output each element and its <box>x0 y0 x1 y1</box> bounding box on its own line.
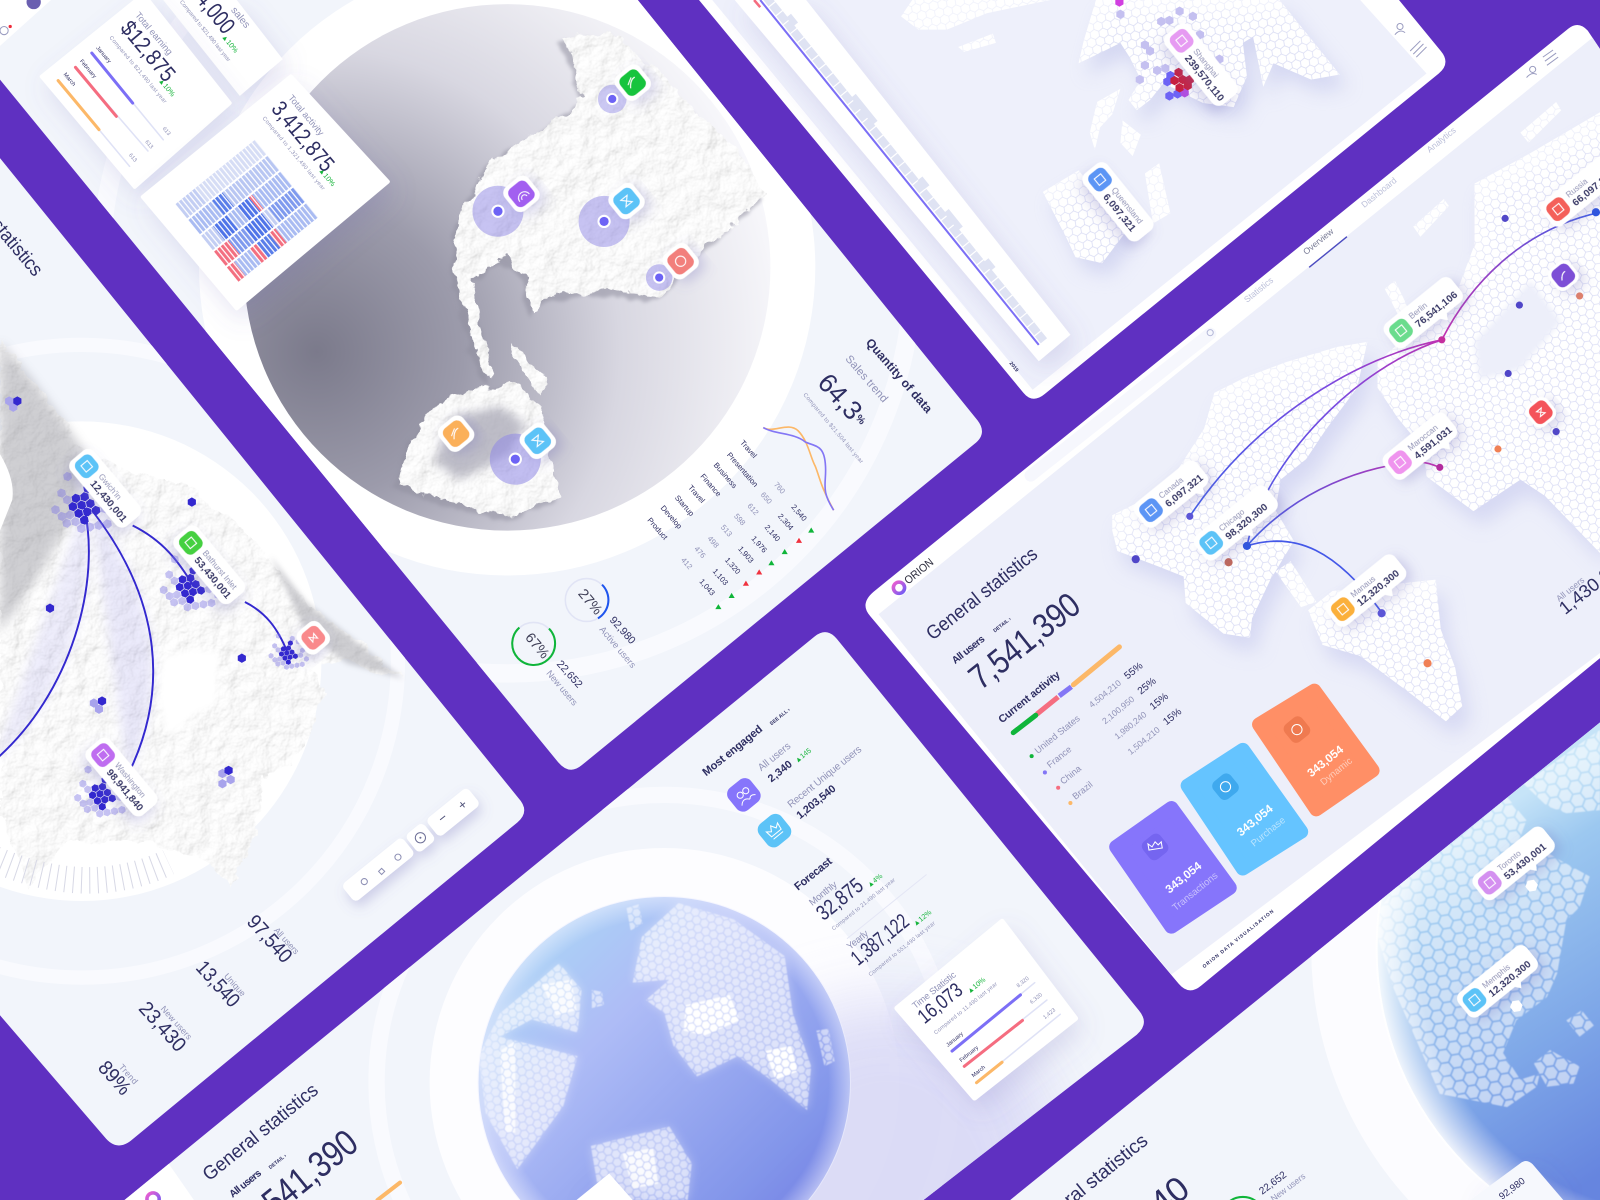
card: transactions <box>1116 808 1230 927</box>
table: categories: Startup <box>673 493 696 518</box>
table: categories: Finance <box>698 472 723 498</box>
ring: active users: 27% <box>574 586 605 619</box>
pin: Chicago: 98,320,300 <box>1224 502 1271 543</box>
pin: Canada: 6,097,321 <box>1164 473 1206 510</box>
card: total earning: 613 <box>143 139 154 150</box>
pin: Chicago: Chicago <box>1217 507 1247 533</box>
card: sales: Compared to $21,490 last year <box>178 0 231 63</box>
white halo disk <box>199 0 815 576</box>
most engaged: Recent Unique users <box>786 744 864 810</box>
ring: active users: 92,980 <box>607 614 638 647</box>
ring: new users: 22,652 <box>554 658 585 691</box>
pin: Queensland <box>1079 159 1157 245</box>
text: general statistics: DETAIL › <box>268 1153 288 1171</box>
pin: Queensland: 6,097,321 <box>1100 192 1137 235</box>
table: activity by country: 1,504,210 <box>1126 725 1162 757</box>
pin: Shanghai <box>1161 20 1241 109</box>
card: time statistic: 16,073 <box>914 979 967 1028</box>
table: categories: 2,540 <box>789 503 809 523</box>
card: time statistic: Time Statistic <box>910 969 958 1011</box>
nav tabs: Analytics <box>1425 125 1458 155</box>
card: sales: ▲10% <box>220 33 240 55</box>
card: total earning: 613 <box>161 126 171 137</box>
white halo disk <box>430 848 899 1200</box>
card: transactions: 343,054 <box>1163 859 1205 896</box>
card: dynamic: Dynamic <box>1318 756 1355 788</box>
stats row: 13,540 <box>191 957 244 1012</box>
card: total activity: Total activity <box>286 93 326 138</box>
pin: Washington <box>82 734 161 820</box>
table: categories: 2,140 <box>763 523 782 543</box>
grey relief globe <box>244 4 770 531</box>
table: activity by country: 15% <box>1148 691 1171 713</box>
card: total activity: Compared to 1,321,490 last year <box>261 116 326 192</box>
outer ring <box>0 345 398 978</box>
lavender glow <box>714 1000 1061 1200</box>
pin: Russia: Russia <box>1564 177 1590 200</box>
table: activity by country: 25% <box>1136 676 1159 697</box>
outer ring around globe <box>98 198 916 682</box>
pin: Toronto <box>1469 823 1561 908</box>
text: general statistics <box>198 1079 400 1200</box>
pin: Manaus <box>1322 551 1413 635</box>
icons: user and filters <box>1395 23 1427 57</box>
most engaged <box>700 707 864 851</box>
logo: Orion: ORION <box>902 557 936 587</box>
card: total activity: 3,412,875 <box>267 96 340 176</box>
card: transactions: Transactions <box>1170 870 1220 914</box>
hex map: Asia and Australia <box>901 0 1348 276</box>
table: activity by country: United States <box>1033 713 1082 756</box>
stats row: New users <box>159 1004 195 1042</box>
line chart: sales trend <box>763 427 834 510</box>
timeline strip <box>735 0 1070 373</box>
forecast: Compared to 21,490 last year <box>831 877 897 932</box>
table: categories: Travel <box>738 438 759 460</box>
card: purchase: 343,054 <box>1235 802 1276 839</box>
pin: Gwich'in: Gwich'in <box>97 472 123 501</box>
card: time statistic: Compared to 11,490 last year <box>933 981 999 1036</box>
table: categories: 1,976 <box>750 534 769 555</box>
icon pin: red marker <box>1522 394 1559 431</box>
pin: Gwich'in <box>66 446 144 531</box>
text: quantity of data: Compared to $21,504 last year <box>802 392 864 465</box>
card: total earning: January <box>94 45 112 65</box>
ring: new users: New users <box>544 668 580 708</box>
white halo disk <box>1311 577 1600 1200</box>
table: activity by country: 2,100,950 <box>1100 694 1136 726</box>
bars: months <box>58 53 163 166</box>
route arcs <box>0 505 288 776</box>
table: categories: Travel <box>686 483 707 505</box>
header and logo <box>124 1163 194 1200</box>
card: purchase <box>1188 750 1301 868</box>
card: total earning: $12,875 <box>116 16 181 87</box>
table: categories: 1,320 <box>723 556 742 576</box>
map dots <box>1132 208 1600 667</box>
icon: users tile <box>724 775 764 815</box>
card: time statistic <box>897 921 1076 1098</box>
current activity bar <box>996 647 1119 733</box>
map controls: − <box>435 809 451 826</box>
pin: Toronto: 53,430,001 <box>1502 842 1549 882</box>
connection arcs <box>1190 212 1600 612</box>
panel: Shanghai hex map <box>694 0 1469 408</box>
card: time statistic: 6,320 <box>1029 992 1044 1006</box>
footer label: ORION DATA VISUALISATION <box>1202 908 1276 970</box>
pin: Bathurst Inlet: 53,430,001 <box>191 555 233 602</box>
stats row: 89% <box>93 1057 135 1100</box>
table: categories: Product <box>645 516 670 542</box>
table: categories: 2,304 <box>776 512 796 533</box>
most engaged: 2,340 <box>766 758 795 785</box>
search bar <box>1031 330 1213 476</box>
table: activity by country: 1,980,240 <box>1112 709 1149 741</box>
pin: Canada <box>1130 457 1215 536</box>
icon pin: red <box>659 240 702 283</box>
table: activity by country: 55% <box>1123 661 1145 682</box>
nav tabs <box>1242 125 1458 305</box>
table: activity by country: France <box>1045 744 1073 770</box>
card: sales: sales <box>228 5 252 31</box>
table: categories: Presentation <box>725 451 760 489</box>
pin: Maroccan <box>1379 409 1464 488</box>
map controls: + <box>455 796 470 813</box>
pin: Chicago <box>1190 482 1285 569</box>
panel: Orion general statistics <box>857 0 1600 1000</box>
text: quantity of data: 64,3 <box>812 368 868 426</box>
pin: Maroccan: Maroccan <box>1406 423 1440 453</box>
icon pin: blue <box>605 179 648 223</box>
forecast: ▲4% <box>866 872 885 889</box>
table: activity by country <box>1030 661 1184 805</box>
card: time statistic: 8,320 <box>1016 976 1031 989</box>
forecast: 32,875 <box>812 873 868 925</box>
table: activity by country: China <box>1058 763 1084 786</box>
stats row: 23,430 <box>134 998 190 1057</box>
table: categories: 498 <box>706 534 721 550</box>
text: general statistics: General statistics <box>198 1079 323 1186</box>
card: total activity <box>143 77 388 308</box>
blue hex globe <box>478 896 851 1200</box>
table: activity by country: 15% <box>1161 706 1184 728</box>
table: activity by country: Brazil <box>1070 779 1095 802</box>
stats row: Trend <box>117 1062 140 1086</box>
pin: Bathurst Inlet: Bathurst Inlet <box>201 549 239 592</box>
pin: Toronto: Toronto <box>1496 849 1523 873</box>
icon pin: purple <box>500 172 543 215</box>
card: time statistic: ▲10% <box>966 975 988 995</box>
table: categories: 650 <box>759 490 774 506</box>
pin: Bathurst Inlet <box>170 522 248 607</box>
forecast: Forecast <box>792 855 835 893</box>
card: purchase: Purchase <box>1249 815 1288 849</box>
panel: blue hex globe <box>1000 577 1600 1200</box>
ring: new users <box>512 622 585 708</box>
stats row: All users <box>272 925 302 957</box>
card: time statistic: March <box>971 1065 987 1079</box>
card fragment at globe bottom <box>577 1173 633 1200</box>
header corner with avatar and bell <box>0 0 51 46</box>
hex map: world <box>1112 102 1600 736</box>
location markers on grey globe <box>472 85 672 485</box>
nav tabs: Dashboard <box>1359 175 1399 210</box>
card: time statistic: January <box>945 1031 965 1048</box>
text: general statistics: All users <box>950 634 988 667</box>
icon: crown tile <box>754 811 795 851</box>
forecast: 1,387,122 <box>846 909 914 970</box>
pin: Washington: Washington <box>113 761 147 800</box>
nav tabs: Overview <box>1301 226 1336 257</box>
outer ring <box>377 795 952 1200</box>
pin: Manaus: 12,320,300 <box>1355 568 1402 609</box>
table: categories: 412 <box>679 556 694 571</box>
text: quantity of data: % <box>853 413 867 427</box>
most engaged: All users <box>756 741 793 774</box>
icon pin: red marker <box>293 618 333 658</box>
icon pin: light blue <box>516 419 559 462</box>
pin: Queensland: Queensland <box>1110 186 1145 226</box>
pin: Memphis <box>1454 942 1544 1025</box>
panel: grey globe and quantity of data <box>0 0 1020 796</box>
heatmap <box>176 140 318 282</box>
icons: user and filters <box>1527 50 1558 78</box>
ring: new users: 67% <box>521 630 552 662</box>
card: total earning <box>42 0 230 187</box>
text: quantity of data <box>802 336 935 465</box>
card: time statistic: 1,423 <box>1042 1007 1057 1021</box>
table: categories: 476 <box>692 544 708 560</box>
pin: Berlin <box>1380 274 1470 356</box>
card: total earning: March <box>62 72 76 88</box>
forecast: Monthly <box>807 879 840 908</box>
ring: active users <box>565 579 638 670</box>
text: quantity of data: Quantity of data <box>863 336 935 416</box>
current activity bar: Current activity <box>996 669 1063 726</box>
pin: Washington: 98,941,840 <box>104 768 145 814</box>
pin: Canada: Canada <box>1157 475 1185 501</box>
forecast <box>792 855 937 978</box>
white halo disk <box>0 421 321 901</box>
ring: new users: 22,652 <box>1257 1170 1289 1197</box>
text: general statistics: General statistics <box>922 543 1042 645</box>
timeline strip: 2019 <box>1008 361 1020 373</box>
forecast: Compared to 551,490 last year <box>868 921 937 978</box>
pin: Gwich'in: 12,430,001 <box>87 479 129 525</box>
card: total earning: February <box>78 59 97 80</box>
stat: all users: All users <box>1554 575 1587 604</box>
most engaged: Most engaged <box>700 723 765 779</box>
pin: Shanghai: Shanghai <box>1191 47 1220 80</box>
table: categories: 513 <box>719 523 734 538</box>
table: activity by country: 4,504,210 <box>1087 678 1123 710</box>
stats row: 97,540 <box>242 911 296 968</box>
card: sales <box>163 0 283 96</box>
bars: months <box>952 983 1060 1083</box>
table: categories: 1,103 <box>711 567 730 587</box>
card: time statistic: February <box>959 1045 980 1064</box>
selected hexes <box>1508 877 1540 1015</box>
most engaged: ▲145 <box>793 747 813 765</box>
text: general statistics <box>922 543 1088 697</box>
icon pin: purple marker <box>1545 257 1582 294</box>
hex clusters <box>5 396 310 822</box>
pin: Shanghai: 239,570,110 <box>1182 53 1226 104</box>
forecast: Yearly <box>845 928 871 952</box>
table: categories <box>645 438 814 609</box>
pin: Memphis: 12,320,300 <box>1487 959 1534 1000</box>
table: categories: 612 <box>745 502 761 517</box>
table: categories: 1,043 <box>697 577 717 597</box>
card fragment: active users <box>1470 1161 1563 1200</box>
ring: new users <box>1220 1170 1308 1200</box>
map controls <box>341 787 481 903</box>
icon pin: orange <box>435 412 478 455</box>
panel: relief map of North America <box>0 153 541 1153</box>
pin: Russia <box>1537 152 1600 230</box>
panel: hex globe and most engaged <box>112 622 1163 1200</box>
table: categories: 1,903 <box>736 544 756 565</box>
card: total earning: Total earning <box>133 10 175 57</box>
table: categories: Business <box>712 461 739 490</box>
pin: Memphis: Memphis <box>1481 963 1512 990</box>
pin: Maroccan: 4,591,031 <box>1413 425 1455 462</box>
icon pin: green <box>611 61 654 104</box>
text: general statistics: 7,541,390 <box>962 586 1088 697</box>
forecast: ▲12% <box>912 908 934 928</box>
logo: Orion <box>893 557 936 593</box>
pin: Manaus: Manaus <box>1349 574 1377 600</box>
card: total activity: ▲10% <box>317 167 337 189</box>
nav tabs: Statistics <box>1242 275 1276 305</box>
text: general statistics: All users <box>228 1168 264 1200</box>
card: total earning: 613 <box>127 153 138 164</box>
table: categories: 760 <box>772 480 787 496</box>
most engaged: SEE ALL › <box>769 707 792 727</box>
card: dynamic <box>1259 691 1372 809</box>
pin: Berlin: 76,541,106 <box>1414 290 1460 330</box>
table: categories: 598 <box>732 512 747 527</box>
card: dynamic: 343,054 <box>1305 743 1346 780</box>
table: categories: Develop <box>659 504 684 531</box>
hot spot hexes <box>1115 0 1223 101</box>
stats row: Unique <box>222 971 248 998</box>
most engaged: 1,203,540 <box>794 783 838 822</box>
text: general statistics: DETAIL › <box>992 616 1013 634</box>
stats row <box>93 911 302 1100</box>
card: total earning: Compared to $21,490 last year <box>108 35 167 105</box>
card: total earning: ▲10% <box>157 77 177 99</box>
ring: active users: Active users <box>597 624 638 670</box>
pin: Berlin: Berlin <box>1407 301 1429 321</box>
relief terrain <box>0 342 403 888</box>
blue globe <box>1372 641 1600 1200</box>
text: quantity of data: Sales trend <box>843 353 890 405</box>
